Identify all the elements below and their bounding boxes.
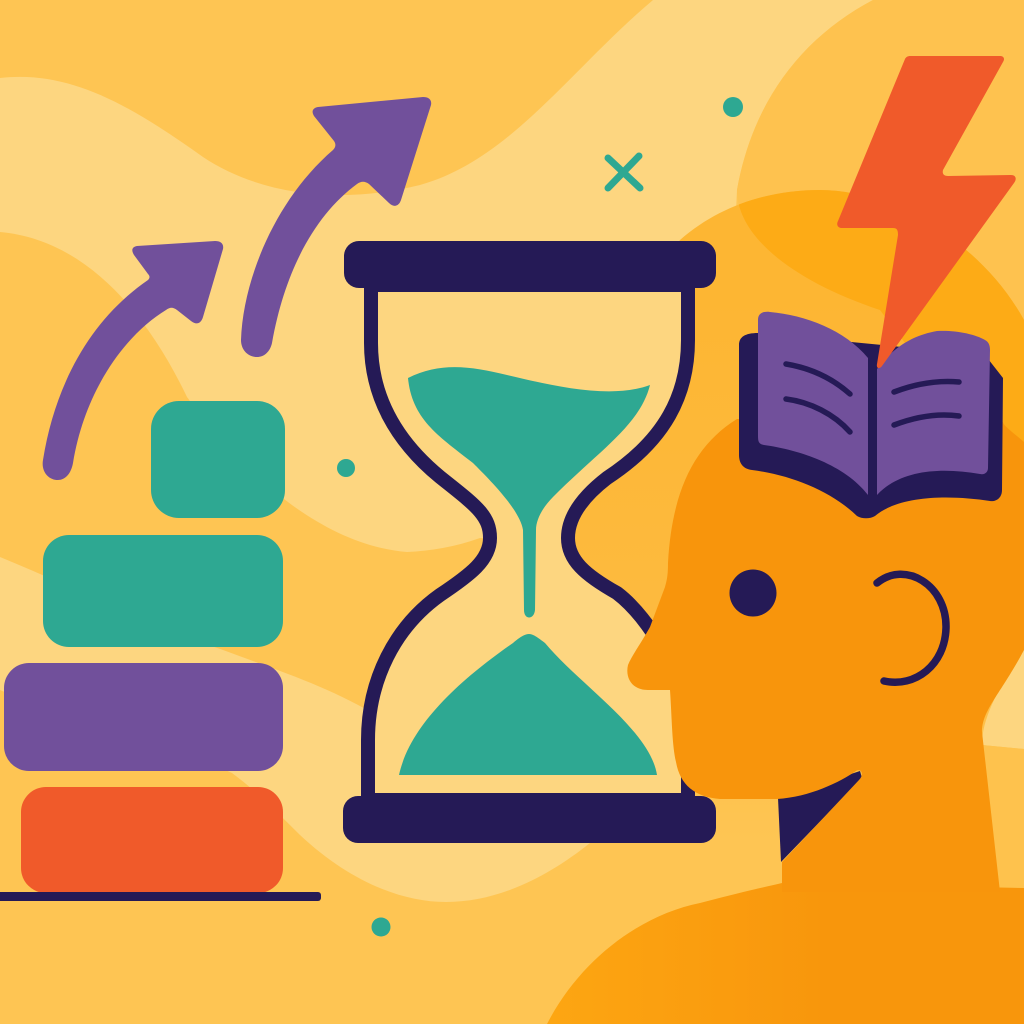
dot: bottom — [372, 918, 390, 936]
head — [627, 419, 1024, 892]
sand: lower — [399, 634, 657, 775]
book right page — [877, 331, 990, 495]
book left page — [758, 312, 868, 495]
baseline — [0, 892, 321, 901]
hourglass bottom bar — [343, 796, 716, 843]
dot: middle — [337, 459, 355, 477]
neck shadow — [778, 771, 862, 862]
ear — [877, 574, 946, 682]
background patch: right of neck — [982, 745, 1024, 895]
background wave: lower light band — [0, 557, 590, 902]
stacked blocks — [0, 401, 321, 901]
background wave: upper light band — [0, 0, 873, 560]
background blob: right of hourglass — [556, 190, 1024, 840]
hourglass — [343, 241, 716, 843]
block: wide teal — [43, 535, 283, 647]
eye — [730, 570, 776, 616]
background blob: overlap of the two blobs — [739, 190, 1024, 442]
icon: small growth arrow — [43, 241, 223, 480]
icon: teal cross — [608, 156, 640, 188]
hourglass glass — [368, 285, 688, 800]
hourglass top bar — [344, 241, 716, 288]
head silhouette — [627, 419, 1024, 892]
book cover — [739, 333, 1003, 518]
background blob: top right — [737, 0, 1024, 400]
dot: top right — [723, 97, 743, 117]
block: purple — [4, 663, 283, 771]
block: orange — [21, 787, 283, 893]
lightning bolt — [837, 56, 1016, 368]
background patch: light strip right — [982, 640, 1024, 749]
icon: large growth arrow — [241, 97, 431, 357]
shoulders — [547, 883, 1024, 1024]
book — [739, 312, 1003, 518]
book text lines — [786, 364, 959, 432]
sand: upper — [408, 367, 650, 618]
block: small teal — [151, 401, 285, 518]
